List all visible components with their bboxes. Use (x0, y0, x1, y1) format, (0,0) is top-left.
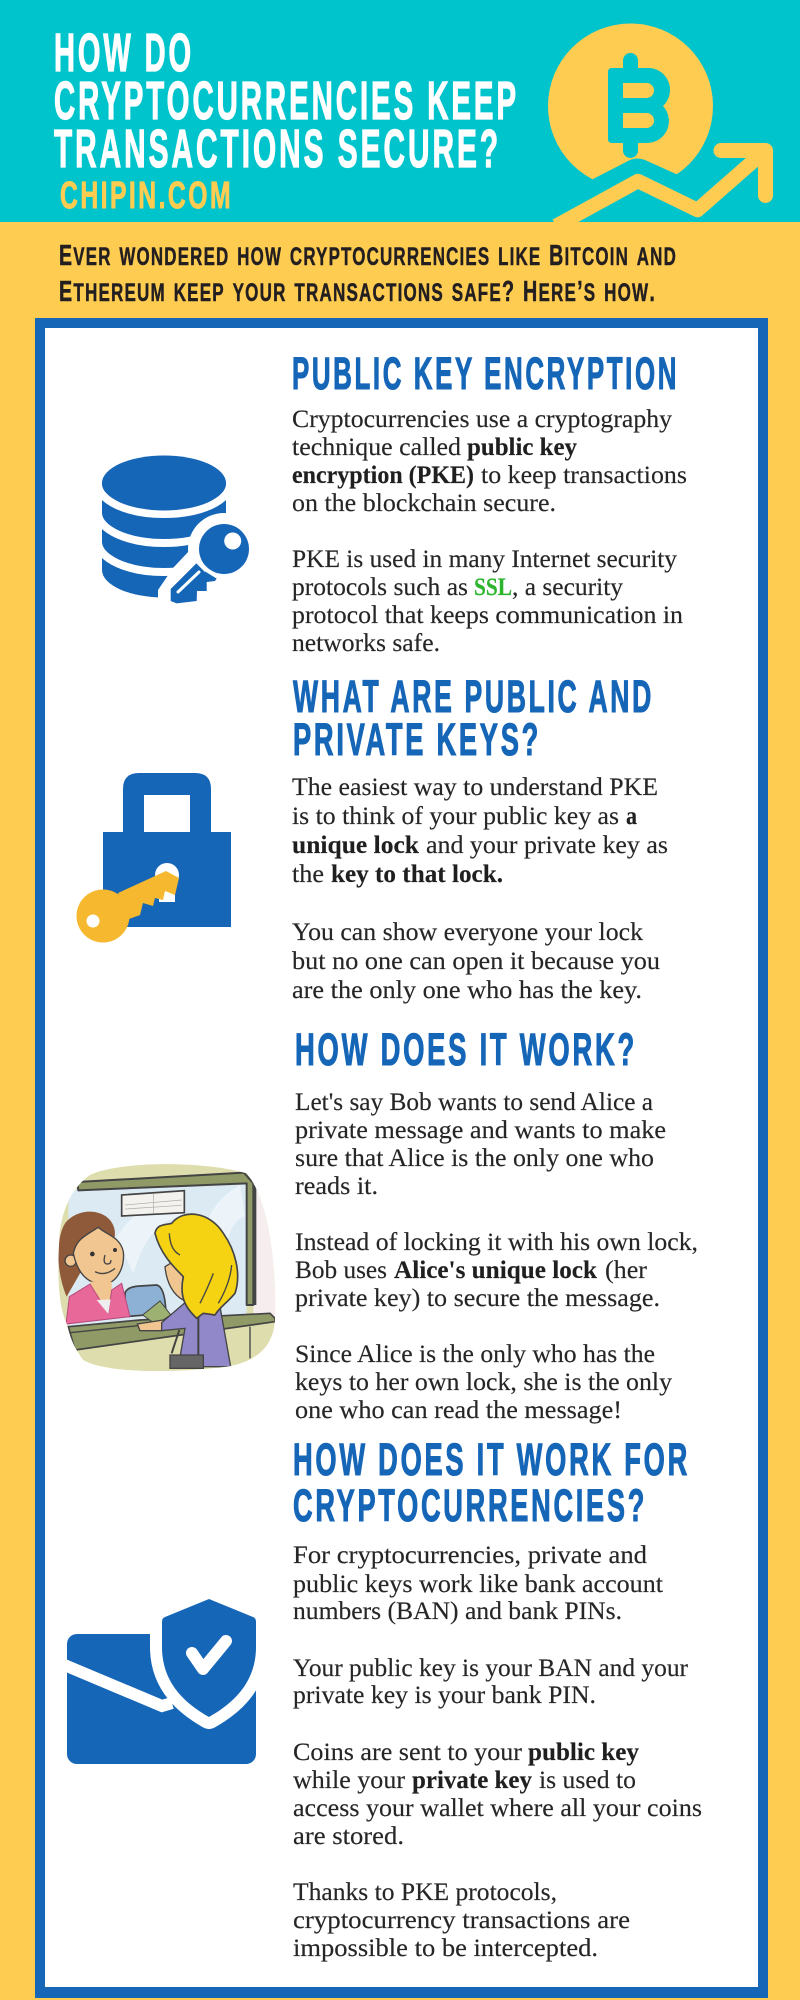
title (54, 23, 519, 179)
body text: For cryptocurrencies, private and (293, 1542, 648, 1569)
heading (293, 1434, 690, 1531)
body text: sure that Alice is the only one who (295, 1145, 654, 1172)
body text: one who can read the message! (295, 1397, 622, 1424)
illustration: bank teller and customer (53, 1157, 280, 1377)
body text: are the only one who has the key. (292, 977, 642, 1004)
body text: Thanks to PKE protocols, (293, 1879, 557, 1906)
body text: (her (605, 1257, 648, 1284)
body text: but no one can open it because you (292, 948, 661, 975)
intro text: Ethereum keep your transactions safe? Here’s how. (59, 270, 656, 309)
heading (293, 671, 654, 765)
body text: is to think of your public key as (292, 803, 619, 830)
body text: technique called (292, 434, 462, 461)
body text (292, 774, 668, 1004)
body text: unique lock (292, 832, 419, 859)
body text: impossible to be intercepted. (293, 1935, 598, 1962)
heading: PRIVATE KEYS? (293, 714, 541, 765)
body text: protocols such as (292, 574, 468, 601)
body text: Let's say Bob wants to send Alice a (295, 1089, 653, 1116)
body text: on the blockchain secure. (292, 490, 556, 517)
intro text: Ever wondered how cryptocurrencies like Bitcoin and (59, 234, 677, 273)
body text: Alice's unique lock (394, 1257, 597, 1284)
body text: public keys work like bank account (293, 1571, 663, 1598)
body text: while your (293, 1767, 406, 1794)
icon: secure envelope with shield (62, 1590, 288, 1770)
icon: database with key (98, 456, 260, 612)
body text: You can show everyone your lock (292, 919, 644, 946)
body text: public key (528, 1739, 639, 1766)
body text: and your private key as (426, 832, 668, 859)
panel: public key encryption (98, 348, 687, 657)
body text: private message and wants to make (295, 1117, 666, 1144)
body text: , a security (512, 574, 624, 601)
body text: cryptocurrency transactions are (293, 1907, 630, 1934)
body text (295, 1089, 698, 1424)
body text (292, 406, 687, 657)
body text: Coins are sent to your (293, 1739, 523, 1766)
body text (293, 1542, 702, 1962)
body text: Your public key is your BAN and your (293, 1655, 689, 1682)
body text: PKE is used in many Internet security (292, 546, 678, 573)
icon: padlock with key (76, 773, 231, 942)
body text: private key (412, 1767, 532, 1794)
body text: private key is your bank PIN. (293, 1682, 596, 1709)
body text: is used to (539, 1767, 636, 1794)
body text: the (292, 861, 324, 888)
body text: to keep transactions (481, 462, 687, 489)
icon: bitcoin coin with rising arrow (548, 24, 766, 226)
body text: reads it. (295, 1173, 378, 1200)
body text: keys to her own lock, she is the only (295, 1369, 673, 1396)
body text: SSL (474, 574, 512, 601)
brand name: CHIPIN.COM (60, 175, 233, 217)
header band (0, 0, 800, 226)
body text: protocol that keeps communication in (292, 602, 684, 629)
body text: Cryptocurrencies use a cryptography (292, 406, 673, 433)
body text: networks safe. (292, 630, 440, 657)
body text: Instead of locking it with his own lock, (295, 1229, 698, 1256)
intro text (59, 234, 677, 309)
body text: a (626, 803, 637, 830)
panel: public and private keys (76, 671, 668, 1004)
body text: encryption (PKE) (292, 462, 474, 489)
body text: key to that lock. (331, 861, 503, 888)
panel: how it works for cryptocurrencies (62, 1434, 702, 1962)
content frame (35, 318, 768, 1998)
body text: Bob uses (295, 1257, 387, 1284)
body text: public key (467, 434, 577, 461)
body text: The easiest way to understand PKE (292, 774, 658, 801)
body text: access your wallet where all your coins (293, 1795, 702, 1822)
body text: are stored. (293, 1823, 404, 1850)
body text: Since Alice is the only who has the (295, 1341, 655, 1368)
title: HOW DO (54, 23, 194, 83)
panel: how does it work (53, 1024, 698, 1424)
body text: numbers (BAN) and bank PINs. (293, 1598, 622, 1625)
body text: private key) to secure the message. (295, 1285, 660, 1312)
